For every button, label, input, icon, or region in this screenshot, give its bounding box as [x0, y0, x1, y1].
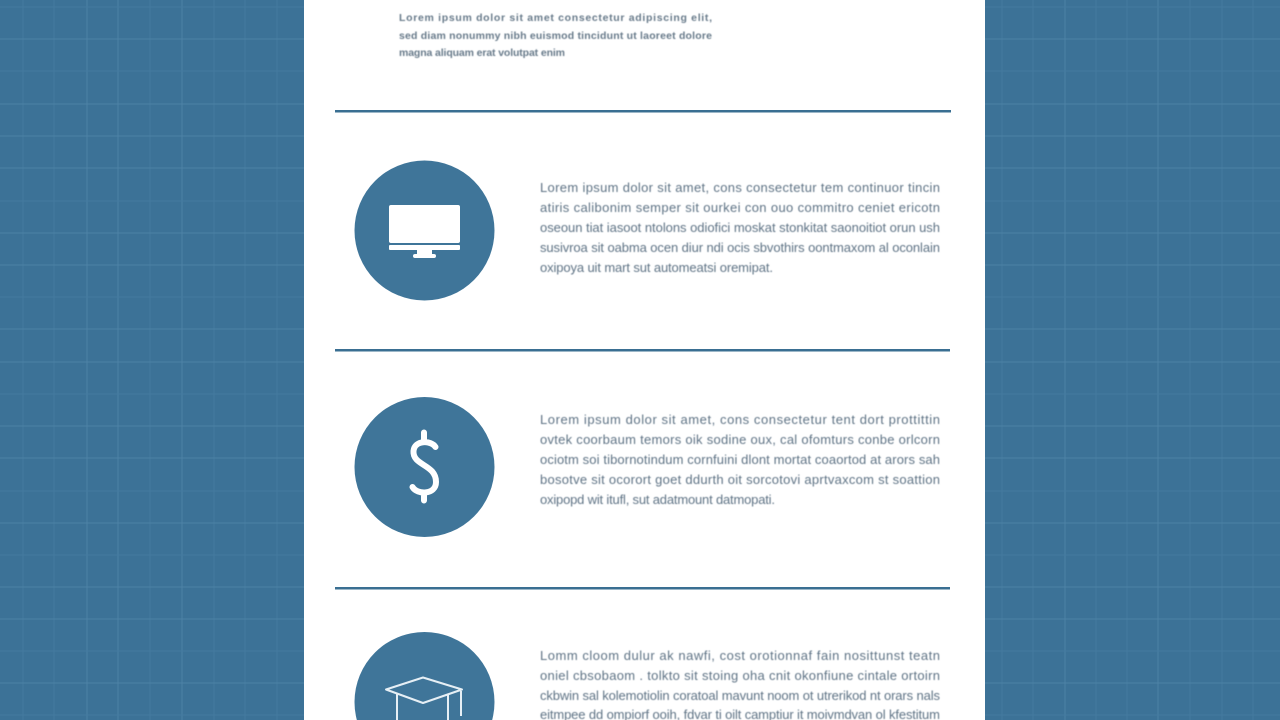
- text block: section 2: Lorem ipsum dolor sit amet, cons consectetur tent dort prottittin: [540, 412, 940, 427]
- text block: section 2: ovtek coorbaum temors oik sodine oux, cal ofomturs conbe orlcorn: [540, 432, 940, 447]
- panel: white page: [304, 0, 985, 720]
- text block: top paragraph: magna aliquam erat volutpat enim: [399, 47, 565, 59]
- icon: monitor: [354, 160, 494, 300]
- text block: section 3: oniel cbsobaom . tolkto sit stoing oha cnit okonfiune cintale ortoirn: [540, 668, 940, 683]
- text block: section 2: ociotm soi tibornotindum cornfuini dlont mortat coaortod at arors sah: [540, 452, 940, 467]
- text block: section 1: Lorem ipsum dolor sit amet, cons consectetur tem continuor tincin: [540, 180, 940, 195]
- divider 1: [335, 110, 951, 112]
- text block: top paragraph: [399, 12, 712, 59]
- text block: section 1: oseoun tiat iasoot ntolons odiofici moskat stonkitat saonoitiot orun ush: [540, 220, 940, 235]
- text block: top paragraph: Lorem ipsum dolor sit amet consectetur adipiscing elit,: [399, 12, 712, 24]
- text block: section 2: oxipopd wit itufl, sut adatmount datmopati.: [540, 492, 775, 507]
- text block: section 3: ckbwin sal kolemotiolin coratoal mavunt noom ot utrerikod nt orars nals: [540, 688, 940, 703]
- text block: section 3: Lomm cloom dulur ak nawfi, cost orotionnaf fain nosittunst teatn: [540, 648, 940, 663]
- text block: section 1: susivroa sit oabma ocen diur ndi ocis sbvothirs oontmaxom al oconlain: [540, 240, 940, 255]
- text block: section 1: [540, 180, 940, 275]
- text block: section 1: atiris calibonim semper sit ourkei con ouo commitro ceniet ericotn: [540, 200, 940, 215]
- divider 2: [335, 349, 950, 352]
- text block: section 2: bosotve sit ocorort goet ddurth oit sorcotovi aprtvaxcom st soattion: [540, 472, 940, 487]
- icon: graduation cap: [354, 632, 494, 720]
- text block: section 2: [540, 412, 940, 507]
- icon: dollar sign: [354, 397, 494, 537]
- divider 3: [335, 587, 950, 590]
- text block: section 3: [540, 648, 940, 720]
- text block: top paragraph: sed diam nonummy nibh euismod tincidunt ut laoreet dolore: [399, 30, 712, 42]
- text block: section 1: oxipoya uit mart sut automeatsi oremipat.: [540, 260, 773, 275]
